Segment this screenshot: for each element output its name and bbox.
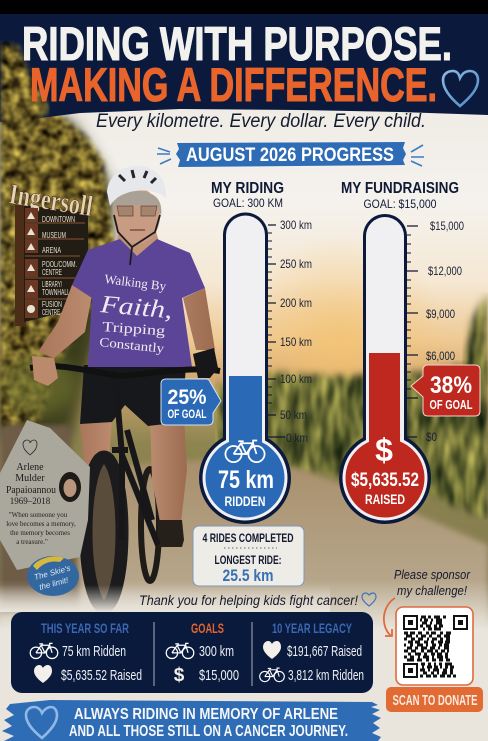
icon: memorial heart	[23, 440, 37, 455]
this year column: THIS YEAR SO FAR	[41, 620, 129, 636]
memorial banner	[2, 700, 381, 741]
front wheel	[86, 457, 122, 607]
fundraising heading: GOAL: $15,000	[364, 197, 437, 211]
memorial name: 1969–2018	[10, 496, 51, 506]
riding scale: 50 km	[280, 408, 307, 422]
ride stats box: 25.5 km	[222, 566, 274, 585]
icon: dollar sign: $	[375, 432, 393, 468]
icon: title heart	[443, 71, 478, 106]
fundraising scale: $15,000	[430, 219, 464, 233]
sign: MUSEUM	[42, 231, 66, 240]
helmet	[107, 166, 166, 206]
bike frame	[112, 372, 158, 545]
memorial name: Arlene	[16, 462, 44, 473]
riding scale: 200 km	[280, 296, 312, 310]
fundraising scale: $12,000	[428, 264, 462, 278]
sponsor note: Please sponsor	[394, 567, 471, 582]
fundraising value	[351, 470, 419, 507]
legacy column: 3,812 km Ridden	[288, 667, 364, 684]
memorial quote	[6, 511, 76, 546]
banner text	[69, 706, 348, 740]
memorial rock	[0, 420, 90, 570]
sign: CENTRE	[42, 268, 62, 277]
riding scale	[268, 218, 312, 445]
hands	[32, 356, 58, 386]
riding value	[218, 466, 274, 509]
t-shirt slogan	[98, 271, 174, 356]
thank you line: Thank you for helping kids fight cancer!	[139, 592, 358, 608]
memorial quote: love becomes a memory,	[6, 520, 76, 528]
ride stats box: LONGEST RIDE:	[214, 553, 282, 567]
thermometer: riding	[199, 212, 312, 524]
goals column: 300 km	[199, 643, 234, 660]
riding heading: MY RIDING	[211, 180, 284, 197]
callout: 25% of goal: OF GOAL	[168, 407, 206, 421]
sign: DOWNTOWN	[42, 215, 75, 224]
legacy column: $191,667 Raised	[287, 643, 362, 660]
riding scale: 100 km	[280, 372, 312, 386]
arrow to QR	[384, 598, 395, 636]
fundraising scale	[407, 219, 464, 444]
callout: 25% of goal	[161, 379, 221, 425]
title	[22, 17, 452, 111]
sign: FUSION	[42, 300, 62, 309]
scan to donate button	[386, 687, 483, 712]
legacy column	[260, 620, 364, 684]
glove	[193, 348, 218, 378]
ride stats box: 4 RIDES COMPLETED	[202, 531, 294, 545]
riding value: 75 km	[218, 466, 274, 494]
painted stone: the limit!	[38, 575, 70, 592]
t-shirt slogan: Constantly	[99, 334, 165, 356]
goals column: GOALS	[191, 620, 224, 636]
t-shirt slogan: Tripping	[102, 320, 166, 339]
foot and sandal	[158, 520, 184, 547]
goals column: $	[174, 665, 185, 686]
thermometer: fundraising	[339, 214, 464, 524]
t-shirt slogan: Faith,	[98, 291, 174, 324]
progress banner: AUGUST 2026 PROGRESS	[186, 145, 394, 166]
sponsor note: my challenge!	[397, 583, 467, 598]
sign	[7, 178, 95, 326]
top black bar	[0, 0, 488, 14]
sign: ARENA	[42, 246, 61, 255]
memorial name: Papaioannou	[6, 485, 56, 496]
shorts	[80, 365, 186, 426]
riding scale: 0 km	[286, 431, 308, 445]
sign: TOWNHALL	[42, 288, 70, 297]
memorial quote: a treasure."	[16, 538, 48, 546]
photo: cyclist on bike	[30, 166, 220, 607]
sponsor note	[394, 567, 471, 598]
t-shirt	[72, 239, 205, 367]
this year column	[30, 620, 142, 684]
riding scale: 150 km	[280, 335, 312, 349]
callout: 38% of goal: OF GOAL	[430, 397, 473, 412]
riding heading	[211, 180, 284, 210]
icon: bike in bulb	[225, 441, 265, 462]
riding value: RIDDEN	[224, 493, 266, 509]
sign: LIBRARY/	[42, 280, 62, 289]
ground fade over wheels	[0, 585, 330, 612]
portrait	[59, 472, 81, 502]
neck	[116, 225, 160, 260]
callout: 25% of goal: 25%	[168, 386, 207, 409]
callout: 38% of goal: 38%	[430, 372, 472, 399]
this year column: $5,635.52 Raised	[61, 667, 142, 684]
banner text: AND ALL THOSE STILL ON A CANCER JOURNEY.	[69, 723, 348, 740]
helmet strap	[114, 215, 160, 265]
fundraising scale: $0	[426, 430, 437, 444]
sign: POOL/COMM.	[42, 260, 77, 269]
memorial quote: the memory becomes	[10, 529, 70, 537]
panel: summary stats	[11, 612, 373, 693]
sign: CENTRE	[42, 308, 60, 317]
navy header band	[0, 14, 488, 122]
rear wheel	[141, 469, 159, 581]
sign: Ingersoll	[7, 178, 95, 223]
fundraising value: $5,635.52	[351, 470, 419, 491]
riding heading: GOAL: 300 KM	[213, 196, 283, 210]
fundraising value: RAISED	[365, 491, 405, 507]
painted stone	[27, 556, 79, 596]
handlebar	[30, 366, 220, 376]
ride stats box	[193, 526, 304, 586]
tagline: Every kilometre. Every dollar. Every child.	[96, 111, 426, 132]
this year column: 75 km Ridden	[62, 643, 126, 660]
legacy column: 10 YEAR LEGACY	[272, 620, 352, 636]
memorial name: Mulder	[15, 473, 45, 484]
fundraising heading	[341, 180, 459, 211]
painted stone: The Skie's	[33, 564, 71, 582]
fundraising scale: $6,000	[426, 349, 455, 363]
banner text: ALWAYS RIDING IN MEMORY OF ARLENE	[74, 706, 338, 723]
icon: thank you heart	[362, 593, 376, 606]
goals column	[166, 620, 239, 686]
arms	[38, 285, 215, 358]
QR code	[396, 607, 473, 685]
goals column: $15,000	[199, 667, 239, 684]
icon: banner heart	[26, 707, 57, 738]
face	[114, 188, 160, 244]
t-shirt slogan: Walking By	[104, 271, 167, 294]
legs	[80, 418, 187, 522]
riding scale: 250 km	[280, 257, 312, 271]
callout: 38% of goal	[411, 365, 480, 416]
memorial quote: "When someone you	[9, 511, 68, 519]
memorial name	[6, 462, 56, 506]
fundraising scale: $9,000	[426, 307, 455, 321]
fundraising heading: MY FUNDRAISING	[341, 180, 459, 197]
tree over header	[0, 40, 50, 125]
riding scale: 300 km	[280, 218, 312, 232]
